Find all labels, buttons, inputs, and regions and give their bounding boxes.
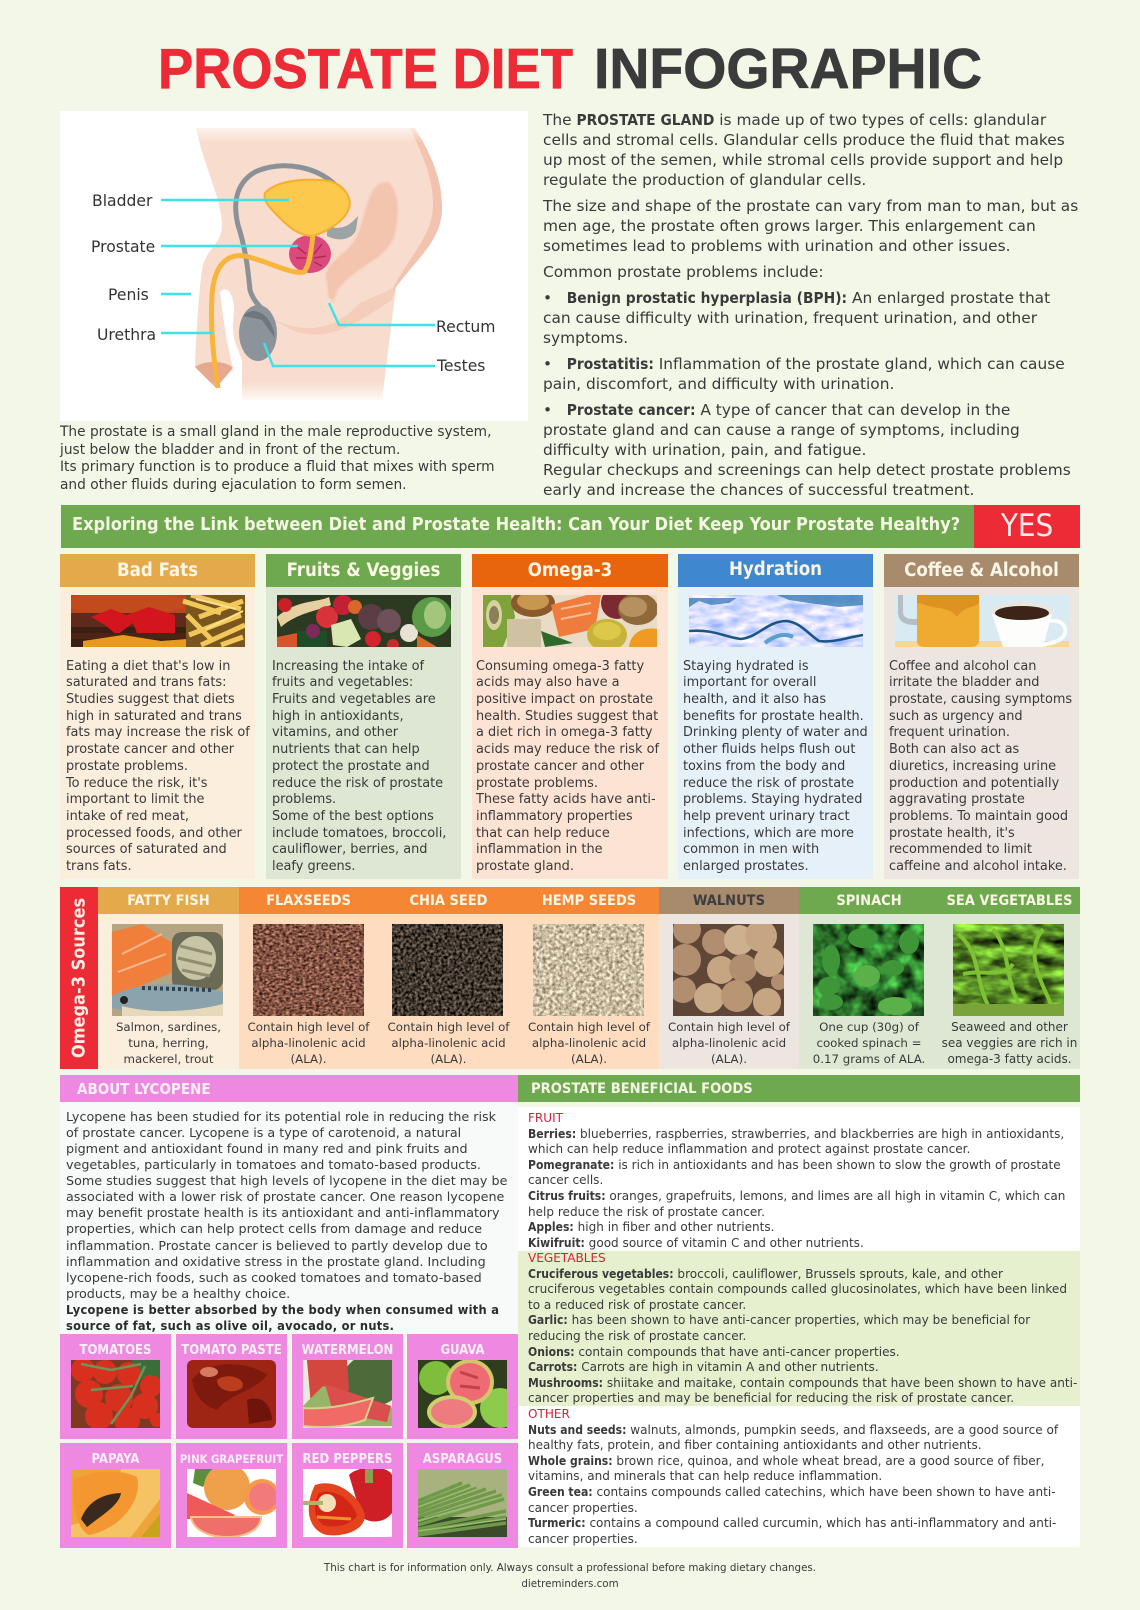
hydration text: benefits for prostate health. <box>683 709 864 724</box>
tile: guava <box>407 1334 518 1439</box>
image: beer and coffee <box>895 595 1069 647</box>
prostate explanation text: pain, discomfort, and difficulty with urination. <box>543 375 894 393</box>
panel: fruit: which can help reduce inflammation and protect against prostate cancer. <box>528 1142 970 1156</box>
hydration text: common in men with <box>683 842 819 857</box>
prostate explanation text: can cause difficulty with urination, frequent urination, and other <box>543 309 1037 327</box>
coffee text: production and potentially <box>889 776 1059 791</box>
lycopene text: Some studies suggest that high levels of lycopene in the diet may be <box>66 1173 507 1188</box>
prostate explanation text: • Prostatitis: Inflammation of the prostate gland, which can cause <box>543 355 1065 373</box>
lycopene heading <box>60 1075 518 1102</box>
prostate explanation text: difficulty with urination, pain, and fatigue. <box>543 441 866 459</box>
source: flaxseeds <box>239 887 378 1069</box>
image: hemp seeds <box>533 924 644 1016</box>
tile: asparagus <box>407 1443 518 1548</box>
bad fats text: prostate problems. <box>66 759 188 774</box>
spinach caption <box>813 1020 925 1066</box>
omega-3 text: Consuming omega-3 fatty <box>476 658 644 674</box>
bad fats text: important to limit the <box>66 792 204 807</box>
tile: pink grapefruit <box>176 1443 287 1548</box>
panel: vegetables: Garlic: has been shown to have anti-cancer properties, which may be beneficial for <box>528 1313 1030 1327</box>
source: fatty fish <box>98 887 239 1069</box>
tile: red peppers: RED PEPPERS <box>303 1452 392 1467</box>
panel: other <box>518 1406 1080 1547</box>
panel: vegetables: Cruciferous vegetables: broccoli, cauliflower, Brussels sprouts, kale, and other <box>528 1267 1003 1281</box>
omega-3 text: acids may also have a <box>476 675 620 690</box>
coffee text: recommended to limit <box>889 842 1032 857</box>
tile: watermelon: WATERMELON <box>302 1343 393 1358</box>
image: spinach <box>813 924 924 1016</box>
rectum <box>326 182 398 302</box>
anatomy diagram <box>60 111 528 421</box>
coffee text: diuretics, increasing urine <box>889 759 1056 774</box>
coffee text: frequent urination. <box>889 725 1010 740</box>
prostate explanation text: cells and stromal cells. Glandular cells produce the fluid that makes <box>543 131 1065 149</box>
intro caption: Its primary function is to produce a fluid that mixes with sperm <box>60 459 495 475</box>
sea vegetables caption: sea veggies are rich in <box>942 1036 1077 1050</box>
tile: tomatoes: TOMATOES <box>80 1343 151 1358</box>
image: tomato paste <box>187 1360 276 1428</box>
omega-3 text: prostate problems. <box>476 776 598 791</box>
sea vegetables caption: omega-3 fatty acids. <box>947 1052 1072 1066</box>
body silhouette <box>190 120 450 404</box>
fruits text: reduce the risk of prostate <box>272 776 443 791</box>
title: INFOGRAPHIC <box>594 37 982 101</box>
prostate explanation text <box>542 111 1078 499</box>
prostate beneficial foods heading <box>518 1075 1080 1102</box>
diagram labels: Penis <box>108 286 149 304</box>
prostate explanation text: up most of the semen, while stromal cells provide support and help <box>543 151 1063 169</box>
panel: fruits and veggies: Fruits & Veggies <box>287 560 440 581</box>
yes badge: YES <box>1001 508 1053 544</box>
tile: papaya: PAPAYA <box>92 1452 139 1467</box>
omega-3 text: that can help reduce <box>476 826 610 841</box>
intro caption: and other fluids during ejaculation to form semen. <box>60 477 407 493</box>
panel: fruit: cancer cells. <box>528 1173 603 1187</box>
bad fats text: trans fats. <box>66 859 132 874</box>
hydration text: reduce the risk of prostate <box>683 776 854 791</box>
bad fats text: prostate cancer and other <box>66 742 234 757</box>
banner question: Exploring the Link between Diet and Prostate Health: Can Your Diet Keep Your Prostate Healthy? <box>72 514 960 535</box>
footer note: dietreminders.com <box>521 1578 619 1590</box>
panel: hydration <box>678 554 873 879</box>
bad fats text: Eating a diet that's low in <box>66 658 230 674</box>
panel: other: Turmeric: contains a compound called curcumin, which has anti-inflammatory and anti- <box>528 1516 1056 1530</box>
title <box>158 37 982 101</box>
image: seaweed <box>953 924 1064 1016</box>
panel: vegetables: Mushrooms: shiitake and maitake, contain compounds that have been shown to have anti- <box>528 1376 1077 1390</box>
prostate explanation text: symptoms. <box>543 329 628 347</box>
tile: guava: GUAVA <box>440 1343 485 1358</box>
image: papaya <box>71 1469 160 1537</box>
prostate <box>289 235 331 273</box>
prostate explanation text: sometimes lead to problems with urination and other issues. <box>543 237 1011 255</box>
flaxseeds caption: alpha-linolenic acid <box>251 1036 366 1050</box>
sea vegetables caption: Seaweed and other <box>951 1020 1068 1034</box>
lycopene text: vegetables, particularly in tomatoes and tomato-based products. <box>66 1157 481 1172</box>
prostate explanation text: • Prostate cancer: A type of cancer that can develop in the <box>543 401 1010 419</box>
source: hemp seeds <box>519 887 659 1069</box>
prostate explanation text: The size and shape of the prostate can vary from man to man, but as <box>543 197 1078 215</box>
leader lines <box>161 200 435 366</box>
vas deferens <box>236 166 340 322</box>
diagram labels: Prostate <box>91 238 155 256</box>
walnuts caption: alpha-linolenic acid <box>672 1036 786 1050</box>
source: spinach <box>799 887 939 1069</box>
diagram labels: Testes <box>436 357 485 375</box>
bad fats text: fats may increase the risk of <box>66 725 250 740</box>
tile: red peppers <box>292 1443 403 1548</box>
fruits text: Increasing the intake of <box>272 658 424 674</box>
chia caption: (ALA). <box>431 1052 466 1066</box>
flaxseeds caption: (ALA). <box>291 1052 326 1066</box>
prostate explanation text: men age, the prostate often grows larger. This enlargement can <box>543 217 1036 235</box>
chia caption: alpha-linolenic acid <box>391 1036 506 1050</box>
coffee text: such as urgency and <box>889 709 1023 724</box>
panel: vegetables: cruciferous vegetables contain compounds called glucosinolates, which have been linked <box>528 1282 1067 1296</box>
coffee text: aggravating prostate <box>889 792 1025 807</box>
fruits text: Some of the best options <box>272 809 434 824</box>
omega-3 text: a diet rich in omega-3 fatty <box>476 725 653 740</box>
coffee text: Coffee and alcohol can <box>889 658 1036 674</box>
fatty fish caption: mackerel, trout <box>123 1052 214 1066</box>
tile: tomato paste: TOMATO PASTE <box>181 1343 282 1358</box>
panel: other: vitamins, and minerals that can help reduce inflammation. <box>528 1469 882 1483</box>
intro caption: just below the bladder and in front of the rectum. <box>60 442 400 458</box>
hydration text: help prevent urinary tract <box>683 809 850 824</box>
panel: fruit: Citrus fruits: oranges, grapefruits, lemons, and limes are all high in vitamin C, which can <box>528 1189 1065 1203</box>
prostate beneficial foods heading: PROSTATE BENEFICIAL FOODS <box>531 1080 753 1097</box>
panel: vegetables: to a reduced risk of prostate cancer. <box>528 1298 746 1312</box>
omega-3 sources side label: Omega-3 Sources <box>68 898 90 1058</box>
source: sea vegetables: SEA VEGETABLES <box>946 893 1072 909</box>
chia caption <box>388 1020 510 1066</box>
lycopene text: pigment and antioxidant found in many red and pink fruits and <box>66 1141 468 1156</box>
lycopene text: lycopene-rich foods, such as cooked tomatoes and tomato-based <box>66 1270 482 1285</box>
hemp caption <box>528 1020 650 1066</box>
image: chia seeds <box>392 924 503 1016</box>
bad fats text <box>66 658 250 874</box>
panel: fruits and veggies <box>266 554 461 879</box>
bad fats text: processed foods, and other <box>66 826 242 841</box>
image: vegetables <box>277 595 451 647</box>
hemp caption: alpha-linolenic acid <box>532 1036 646 1050</box>
lycopene text: Lycopene has been studied for its potential role in reducing the risk <box>66 1109 496 1124</box>
bad fats text: intake of red meat, <box>66 809 189 824</box>
diagram labels: Urethra <box>97 326 156 344</box>
banner question <box>61 505 974 548</box>
seminal vesicle <box>327 216 358 239</box>
panel: other: cancer properties. <box>528 1532 638 1546</box>
panel: other: Whole grains: brown rice, quinoa, and whole wheat bread, are a good source of fiber, <box>528 1454 1044 1468</box>
fruits text: high in antioxidants, <box>272 709 404 724</box>
hemp caption: (ALA). <box>571 1052 607 1066</box>
bad fats text: To reduce the risk, it's <box>66 776 208 791</box>
panel: fruit: FRUIT <box>528 1111 563 1125</box>
bad fats text: Studies suggest that diets <box>66 692 235 707</box>
fruits text: leafy greens. <box>272 859 356 874</box>
spinach caption: 0.17 grams of ALA. <box>813 1052 925 1066</box>
yes badge <box>974 505 1080 548</box>
hemp caption: Contain high level of <box>528 1020 650 1034</box>
image: omega-3 foods <box>483 595 657 647</box>
image: pink grapefruit <box>187 1469 276 1537</box>
source: chia seed <box>378 887 519 1069</box>
bad fats text: sources of saturated and <box>66 842 227 857</box>
lycopene text <box>60 1102 518 1334</box>
tile: watermelon <box>292 1334 403 1439</box>
panel: other: Nuts and seeds: walnuts, almonds, pumpkin seeds, and flaxseeds, are a good source of <box>528 1423 1058 1437</box>
diagram labels: Bladder <box>92 192 153 210</box>
omega-3 text: health. Studies suggest that <box>476 709 658 724</box>
source: walnuts <box>659 887 799 1069</box>
prostate explanation text: • Benign prostatic hyperplasia (BPH): An enlarged prostate that <box>543 289 1050 307</box>
prostate explanation text: The PROSTATE GLAND is made up of two types of cells: glandular <box>543 111 1046 129</box>
panel: bad fats <box>60 554 255 879</box>
lycopene text: products, may be a healthy choice. <box>66 1286 290 1301</box>
tile: asparagus: ASPARAGUS <box>423 1452 502 1467</box>
panel: fruit <box>518 1107 1080 1251</box>
source: spinach: SPINACH <box>836 893 902 909</box>
image: asparagus <box>418 1469 507 1537</box>
panel: vegetables <box>518 1251 1080 1406</box>
coffee text: caffeine and alcohol intake. <box>889 859 1067 874</box>
prostate explanation text: early and increase the chances of successful treatment. <box>543 481 974 499</box>
omega-3 sources side label <box>60 887 98 1069</box>
coffee text: prostate health, it's <box>889 826 1015 841</box>
footer note: This chart is for information only. Always consult a professional before making dietary changes. <box>324 1562 816 1574</box>
footer note <box>324 1562 816 1590</box>
panel: coffee and alcohol: Coffee & Alcohol <box>904 560 1059 581</box>
image: fish and sardines <box>112 924 223 1016</box>
walnuts caption: (ALA). <box>711 1052 747 1066</box>
lycopene text: inflammation. Prostate cancer is believed to partly develop due to <box>66 1238 488 1252</box>
panel: vegetables: Carrots: Carrots are high in vitamin A and other nutrients. <box>528 1360 879 1374</box>
lycopene text: source of fat, such as olive oil, avocado, or nuts. <box>66 1318 394 1333</box>
panel: other: cancer properties. <box>528 1501 638 1515</box>
tile: papaya <box>60 1443 171 1548</box>
prostate explanation text: Common prostate problems include: <box>543 263 824 281</box>
lycopene text: Lycopene is better absorbed by the body when consumed with a <box>66 1302 499 1317</box>
fruits text: nutrients that can help <box>272 742 420 757</box>
lycopene text: properties, which can help protect cells from damage and reduce <box>66 1221 482 1236</box>
fruits text: vitamins, and other <box>272 725 398 740</box>
image: guava <box>418 1360 507 1428</box>
fatty fish caption: tuna, herring, <box>128 1036 209 1050</box>
fruits text: include tomatoes, broccoli, <box>272 826 446 841</box>
chia caption: Contain high level of <box>388 1020 509 1034</box>
urethra <box>211 235 313 388</box>
panel: other: healthy fats, protein, and fiber containing antioxidants and other nutrients. <box>528 1438 982 1452</box>
coffee text <box>889 658 1072 874</box>
hydration text: health, and it also has <box>683 692 826 707</box>
testis <box>239 305 277 361</box>
image: water splash <box>689 595 863 647</box>
diagram labels: Rectum <box>436 318 496 336</box>
flaxseeds caption: Contain high level of <box>248 1020 369 1034</box>
tile: pink grapefruit: PINK GRAPEFRUIT <box>180 1453 283 1466</box>
spinach caption: cooked spinach = <box>816 1036 922 1050</box>
source: flaxseeds: FLAXSEEDS <box>266 893 351 909</box>
panel: vegetables: reducing the risk of prostate cancer. <box>528 1329 746 1343</box>
fruits text: fruits and vegetables: <box>272 675 413 690</box>
image: watermelon <box>303 1360 392 1428</box>
hydration text: important for overall <box>683 675 816 690</box>
walnuts caption: Contain high level of <box>668 1020 790 1034</box>
fatty fish caption <box>116 1020 221 1066</box>
flaxseeds caption <box>248 1020 370 1066</box>
omega-3 text: positive impact on prostate <box>476 692 653 707</box>
intro caption <box>60 424 495 493</box>
omega-3 text: inflammatory properties <box>476 809 633 824</box>
fruits text <box>272 658 446 874</box>
source: walnuts: WALNUTS <box>693 893 765 909</box>
coffee text: irritate the bladder and <box>889 675 1039 690</box>
diagram labels <box>91 192 496 375</box>
prostate explanation text: regulate the production of glandular cells. <box>543 171 866 189</box>
panel: omega-3 <box>472 554 668 879</box>
image: red peppers <box>303 1469 392 1537</box>
walnuts caption <box>668 1020 790 1066</box>
panel: vegetables: VEGETABLES <box>528 1251 606 1265</box>
bladder <box>265 180 350 236</box>
lycopene text: inflammation and oxidative stress in the prostate gland. Including <box>66 1254 486 1269</box>
omega-3 text <box>476 658 660 874</box>
fruits text: protect the prostate and <box>272 759 430 774</box>
fruits text: cauliflower, berries, and <box>272 842 427 857</box>
panel: vegetables: Onions: contain compounds that have anti-cancer properties. <box>528 1345 900 1359</box>
source: hemp seeds: HEMP SEEDS <box>542 893 636 909</box>
hydration text: infections, which are more <box>683 826 854 841</box>
panel: coffee and alcohol <box>884 554 1079 879</box>
lycopene text: of prostate cancer. Lycopene is a type of carotenoid, a natural <box>66 1125 461 1140</box>
prostate explanation text: Regular checkups and screenings can help detect prostate problems <box>543 461 1071 479</box>
coffee text: problems. To maintain good <box>889 809 1068 824</box>
lycopene text: may benefit prostate health is its antioxidant and anti-inflammatory <box>66 1205 500 1220</box>
panel: vegetables: cancer properties and may be beneficial for reducing the risk of prostate cancer. <box>528 1391 1014 1405</box>
hydration text: problems. Staying hydrated <box>683 792 862 807</box>
coffee text: prostate, causing symptoms <box>889 692 1072 707</box>
fatty fish caption: Salmon, sardines, <box>116 1020 221 1034</box>
omega-3 text: These fatty acids have anti- <box>476 792 656 807</box>
omega-3 text: acids may reduce the risk of <box>476 742 659 757</box>
hydration text: enlarged prostates. <box>683 859 809 874</box>
tile: tomato paste <box>176 1334 287 1439</box>
image: tomatoes <box>71 1360 160 1428</box>
panel: other: OTHER <box>528 1407 570 1421</box>
hydration text: toxins from the body and <box>683 759 845 774</box>
source: sea vegetables <box>939 887 1080 1069</box>
prostate explanation text: prostate gland and can cause a range of symptoms, including <box>543 421 1020 439</box>
panel: other: Green tea: contains compounds called catechins, which have been shown to have anti- <box>528 1485 1056 1499</box>
omega-3 text: inflammation in the <box>476 842 603 857</box>
panel: fruit: Pomegranate: is rich in antioxidants and has been shown to slow the growth of prostate <box>528 1158 1061 1172</box>
source: chia seed: CHIA SEED <box>409 893 488 909</box>
panel: fruit: help reduce the risk of prostate cancer. <box>528 1205 765 1219</box>
sea vegetables caption <box>942 1020 1077 1066</box>
panel: bad fats: Bad Fats <box>117 560 198 581</box>
image: burger and fries <box>71 595 245 647</box>
bad fats text: saturated and trans fats: <box>66 675 226 690</box>
spinach caption: One cup (30g) of <box>819 1020 919 1034</box>
bad fats text: high in saturated and trans <box>66 709 242 724</box>
hydration text: Staying hydrated is <box>683 658 809 674</box>
coffee text: Both can also act as <box>889 742 1019 757</box>
hydration text: Drinking plenty of water and <box>683 725 868 740</box>
fruits text: problems. <box>272 792 336 807</box>
omega-3 text: prostate cancer and other <box>476 759 644 774</box>
tile: tomatoes <box>60 1334 171 1439</box>
image: walnuts <box>673 924 784 1016</box>
panel: fruit: Berries: blueberries, raspberries, strawberries, and blackberries are high in antioxidants, <box>528 1127 1064 1141</box>
title: PROSTATE DIET <box>158 37 573 101</box>
source: fatty fish: FATTY FISH <box>127 893 210 909</box>
panel: hydration: Hydration <box>729 559 822 580</box>
fruits text: Fruits and vegetables are <box>272 692 436 707</box>
intro caption: The prostate is a small gland in the male reproductive system, <box>60 424 491 440</box>
panel: omega-3: Omega-3 <box>528 560 612 581</box>
panel: fruit: Apples: high in fiber and other nutrients. <box>528 1220 775 1234</box>
hydration text <box>683 658 868 874</box>
hydration text: other fluids helps flush out <box>683 742 855 757</box>
panel: fruit: Kiwifruit: good source of vitamin C and other nutrients. <box>528 1236 864 1250</box>
lycopene heading: ABOUT LYCOPENE <box>77 1080 211 1098</box>
lycopene text: associated with a lower risk of prostate cancer. One reason lycopene <box>66 1189 504 1204</box>
image: flaxseeds <box>253 924 364 1016</box>
omega-3 text: prostate gland. <box>476 859 574 874</box>
